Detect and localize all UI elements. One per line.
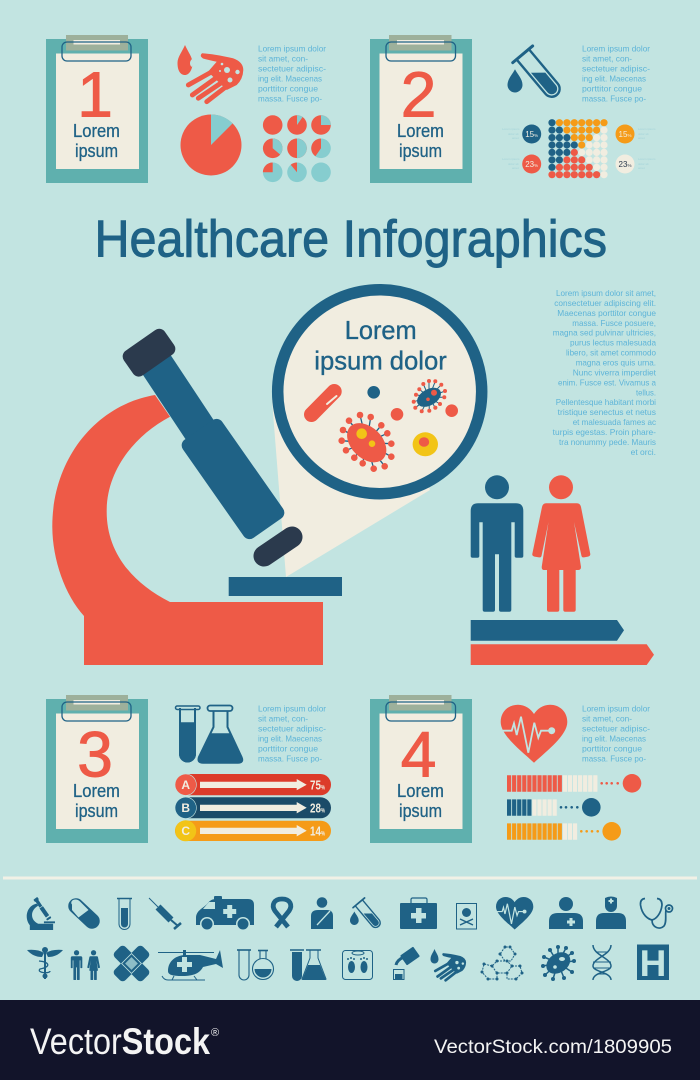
image id: VectorStock.com/1809905 xyxy=(434,1037,672,1058)
text block 4: sectetuer adipisc- xyxy=(582,724,650,734)
text block: main paragraph: turpis egestas. Proin phare- xyxy=(553,427,656,437)
text block 1: massa. Fusce po- xyxy=(258,94,322,104)
magnifier circle: Lorem xyxy=(345,315,417,345)
text block 3: ing elit. Maecenas xyxy=(258,734,322,744)
text block 3 xyxy=(258,704,326,764)
legend: dot matrix percentages: dolor sit xyxy=(638,162,649,166)
legend: dot matrix percentages: 23% xyxy=(619,160,631,169)
panel: clipboard 3 xyxy=(46,695,148,843)
icon: pouring bottle xyxy=(394,946,420,980)
icon row 1 xyxy=(27,896,672,931)
panel: clipboard 1: 1 xyxy=(77,59,113,131)
panel: clipboard 4: Lorem xyxy=(397,781,444,801)
text block: main paragraph: magna sed pulvinar ultricies, xyxy=(553,328,656,338)
legend: dot matrix percentages: amet xyxy=(638,166,645,170)
icon: weighing scale xyxy=(342,950,372,980)
light cone xyxy=(272,400,430,577)
text block: main paragraph: libero, sit amet commodo xyxy=(566,348,656,358)
bar B xyxy=(175,797,331,819)
icon: hand and drop small xyxy=(430,949,466,980)
icon: hospital sign: H xyxy=(640,943,666,984)
panel: clipboard 1 xyxy=(46,35,148,183)
legend: dot matrix percentages: dolor sit xyxy=(638,132,649,136)
text block 1 xyxy=(258,44,326,104)
icon: microscope xyxy=(27,897,55,930)
microscope xyxy=(52,326,342,665)
icon: tube and round flask xyxy=(237,950,274,980)
panel: clipboard 2 xyxy=(370,35,472,183)
text block: main paragraph: enim. Fusce est. Vivamus a xyxy=(558,377,656,387)
legend: dot matrix percentages xyxy=(502,124,656,174)
panel: clipboard 1: ipsum xyxy=(75,141,118,161)
text block: main paragraph: tra nonummy pede. Mauris xyxy=(559,437,656,447)
text block: main paragraph xyxy=(553,288,657,457)
bar C: 14% xyxy=(310,824,325,838)
icon: injured person xyxy=(311,897,333,929)
icon: tube and drop xyxy=(350,898,384,931)
icon: test tube and flask xyxy=(176,706,243,763)
panel: clipboard 4: 4 xyxy=(401,719,436,791)
text block: main paragraph: massa. Fusce posuere, xyxy=(572,318,656,328)
chart: segmented progress bars xyxy=(507,774,641,841)
text block: main paragraph: Pellentesque habitant morbi xyxy=(556,397,656,407)
text block 1: Lorem ipsum dolor xyxy=(258,44,326,54)
legend: dot matrix percentages: 15% xyxy=(619,130,631,139)
text block 2: porttitor congue xyxy=(582,84,642,94)
bacteria: capsule xyxy=(312,392,336,414)
text block 1: ing elit. Maecenas xyxy=(258,74,322,84)
icon: heart pulse small xyxy=(496,897,533,929)
text block 4: porttitor congue xyxy=(582,744,642,754)
legend: dot matrix percentages: amet xyxy=(512,166,519,170)
text block 2: sit amet, con- xyxy=(582,54,632,64)
legend: dot matrix percentages: Lorem ipsum xyxy=(638,157,656,161)
panel: clipboard 2: ipsum xyxy=(399,141,442,161)
text block 3: porttitor congue xyxy=(258,744,318,754)
text block 3: sit amet, con- xyxy=(258,714,308,724)
icon: man xyxy=(471,475,523,612)
text block: main paragraph: tristique senectus et netus xyxy=(558,407,656,417)
legend: dot matrix percentages: amet xyxy=(512,136,519,140)
text block 1: porttitor congue xyxy=(258,84,318,94)
bar C xyxy=(175,820,331,841)
logo: registered mark: ® xyxy=(211,1027,219,1039)
virus: small xyxy=(412,379,447,413)
icon: heart with pulse xyxy=(501,705,567,763)
legend: dot matrix percentages: Lorem ipsum xyxy=(502,157,520,161)
text block: main paragraph: et malesuada fames ac xyxy=(573,417,656,427)
cell: yellow xyxy=(413,432,438,456)
magnifier circle: ipsum dolor xyxy=(314,345,447,375)
panel: clipboard 4: ipsum xyxy=(399,801,442,821)
logo: VectorStock: VectorStock xyxy=(30,1021,210,1062)
chart: dot matrix xyxy=(548,119,608,178)
footer bar xyxy=(0,1000,700,1080)
panel: clipboard 3: Lorem xyxy=(73,781,120,801)
legend: dot matrix percentages: Lorem ipsum xyxy=(502,127,520,131)
text block 4: Lorem ipsum dolor xyxy=(582,704,650,714)
bar A: 75% xyxy=(310,778,325,792)
arrow bar: red xyxy=(471,644,654,665)
text block 4: ing elit. Maecenas xyxy=(582,734,646,744)
icon: virus xyxy=(541,945,576,981)
arrow bar: blue xyxy=(471,620,624,641)
text block 2: massa. Fusce po- xyxy=(582,94,646,104)
icon: ambulance xyxy=(196,896,254,931)
text block: main paragraph: tellus. xyxy=(636,387,656,397)
icon: doctor xyxy=(549,897,583,929)
text block 4: massa. Fusce po- xyxy=(582,754,646,764)
icon: molecule xyxy=(480,946,524,980)
text block: main paragraph: purus lectus malesuada xyxy=(570,338,656,348)
icon: helicopter xyxy=(158,950,223,980)
text block 2 xyxy=(582,44,650,104)
legend: dot matrix percentages: Lorem ipsum xyxy=(638,127,656,131)
text block 3: Lorem ipsum dolor xyxy=(258,704,326,714)
icon: hand and red drop xyxy=(178,45,243,102)
panel: clipboard 3: ipsum xyxy=(75,801,118,821)
panel: clipboard 4 xyxy=(370,695,472,843)
text block 2: ing elit. Maecenas xyxy=(582,74,646,84)
legend: dot matrix percentages: dolor sit xyxy=(508,162,519,166)
icon row 2 xyxy=(27,943,669,984)
cells: dots xyxy=(367,386,458,421)
bar A xyxy=(175,774,331,796)
text block 2: sectetuer adipisc- xyxy=(582,64,650,74)
icon: nurse xyxy=(596,896,626,929)
text block: main paragraph: consectetuer adipiscing elit. xyxy=(554,298,656,308)
text block 3: sectetuer adipisc- xyxy=(258,724,326,734)
icon: woman xyxy=(532,475,590,612)
icon: woman small xyxy=(87,950,100,980)
icon: caduceus xyxy=(27,947,63,979)
text block: main paragraph: et orci. xyxy=(631,447,656,457)
icon: capsule xyxy=(71,900,92,921)
icon: test tube small xyxy=(117,898,132,930)
text block: main paragraph: Nunc viverra imperdiet xyxy=(573,367,657,377)
legend: dot matrix percentages: 15% xyxy=(525,130,538,139)
icon: first aid kit xyxy=(400,898,437,929)
virus: large xyxy=(338,412,395,472)
text block: main paragraph: Maecenas porttitor congue xyxy=(557,308,656,318)
icon: tube and conical flask xyxy=(290,950,326,981)
panel: clipboard 2: 2 xyxy=(401,59,436,131)
bar B: 28% xyxy=(310,800,325,816)
icon: test tube with drop xyxy=(508,46,567,103)
text block 1: sit amet, con- xyxy=(258,54,308,64)
icon: DNA xyxy=(593,945,611,980)
text block 1: sectetuer adipisc- xyxy=(258,64,326,74)
text block 3: massa. Fusce po- xyxy=(258,754,322,764)
icon: bandage xyxy=(112,944,151,983)
bar A: A xyxy=(181,778,190,792)
bar chart: A B C xyxy=(175,774,331,841)
pie chart: large xyxy=(180,114,242,176)
legend: dot matrix percentages: 23% xyxy=(525,160,538,169)
icon: stethoscope xyxy=(640,898,672,928)
panel: clipboard 2: Lorem xyxy=(397,121,444,141)
panel: clipboard 3: 3 xyxy=(77,719,113,791)
legend: dot matrix percentages: amet xyxy=(638,136,645,140)
title: Healthcare Infographics xyxy=(94,211,607,269)
text block 4 xyxy=(582,704,650,764)
text block: main paragraph: Lorem ipsum dolor sit amet, xyxy=(556,288,656,298)
icon: ribbon xyxy=(273,899,291,927)
panel: clipboard 1: Lorem xyxy=(73,121,120,141)
text block 4: sit amet, con- xyxy=(582,714,632,724)
legend: dot matrix percentages: dolor sit xyxy=(508,132,519,136)
icon: man small xyxy=(71,950,82,980)
text block 2: Lorem ipsum dolor xyxy=(582,44,650,54)
pie chart: small grid xyxy=(263,115,331,182)
icon: syringe xyxy=(149,898,181,929)
bar B: B xyxy=(181,801,190,815)
bar C: C xyxy=(181,824,190,838)
magnifier circle xyxy=(278,290,482,494)
icon: poison xyxy=(456,904,476,929)
text block: main paragraph: magna eros quis urna. xyxy=(576,358,656,368)
